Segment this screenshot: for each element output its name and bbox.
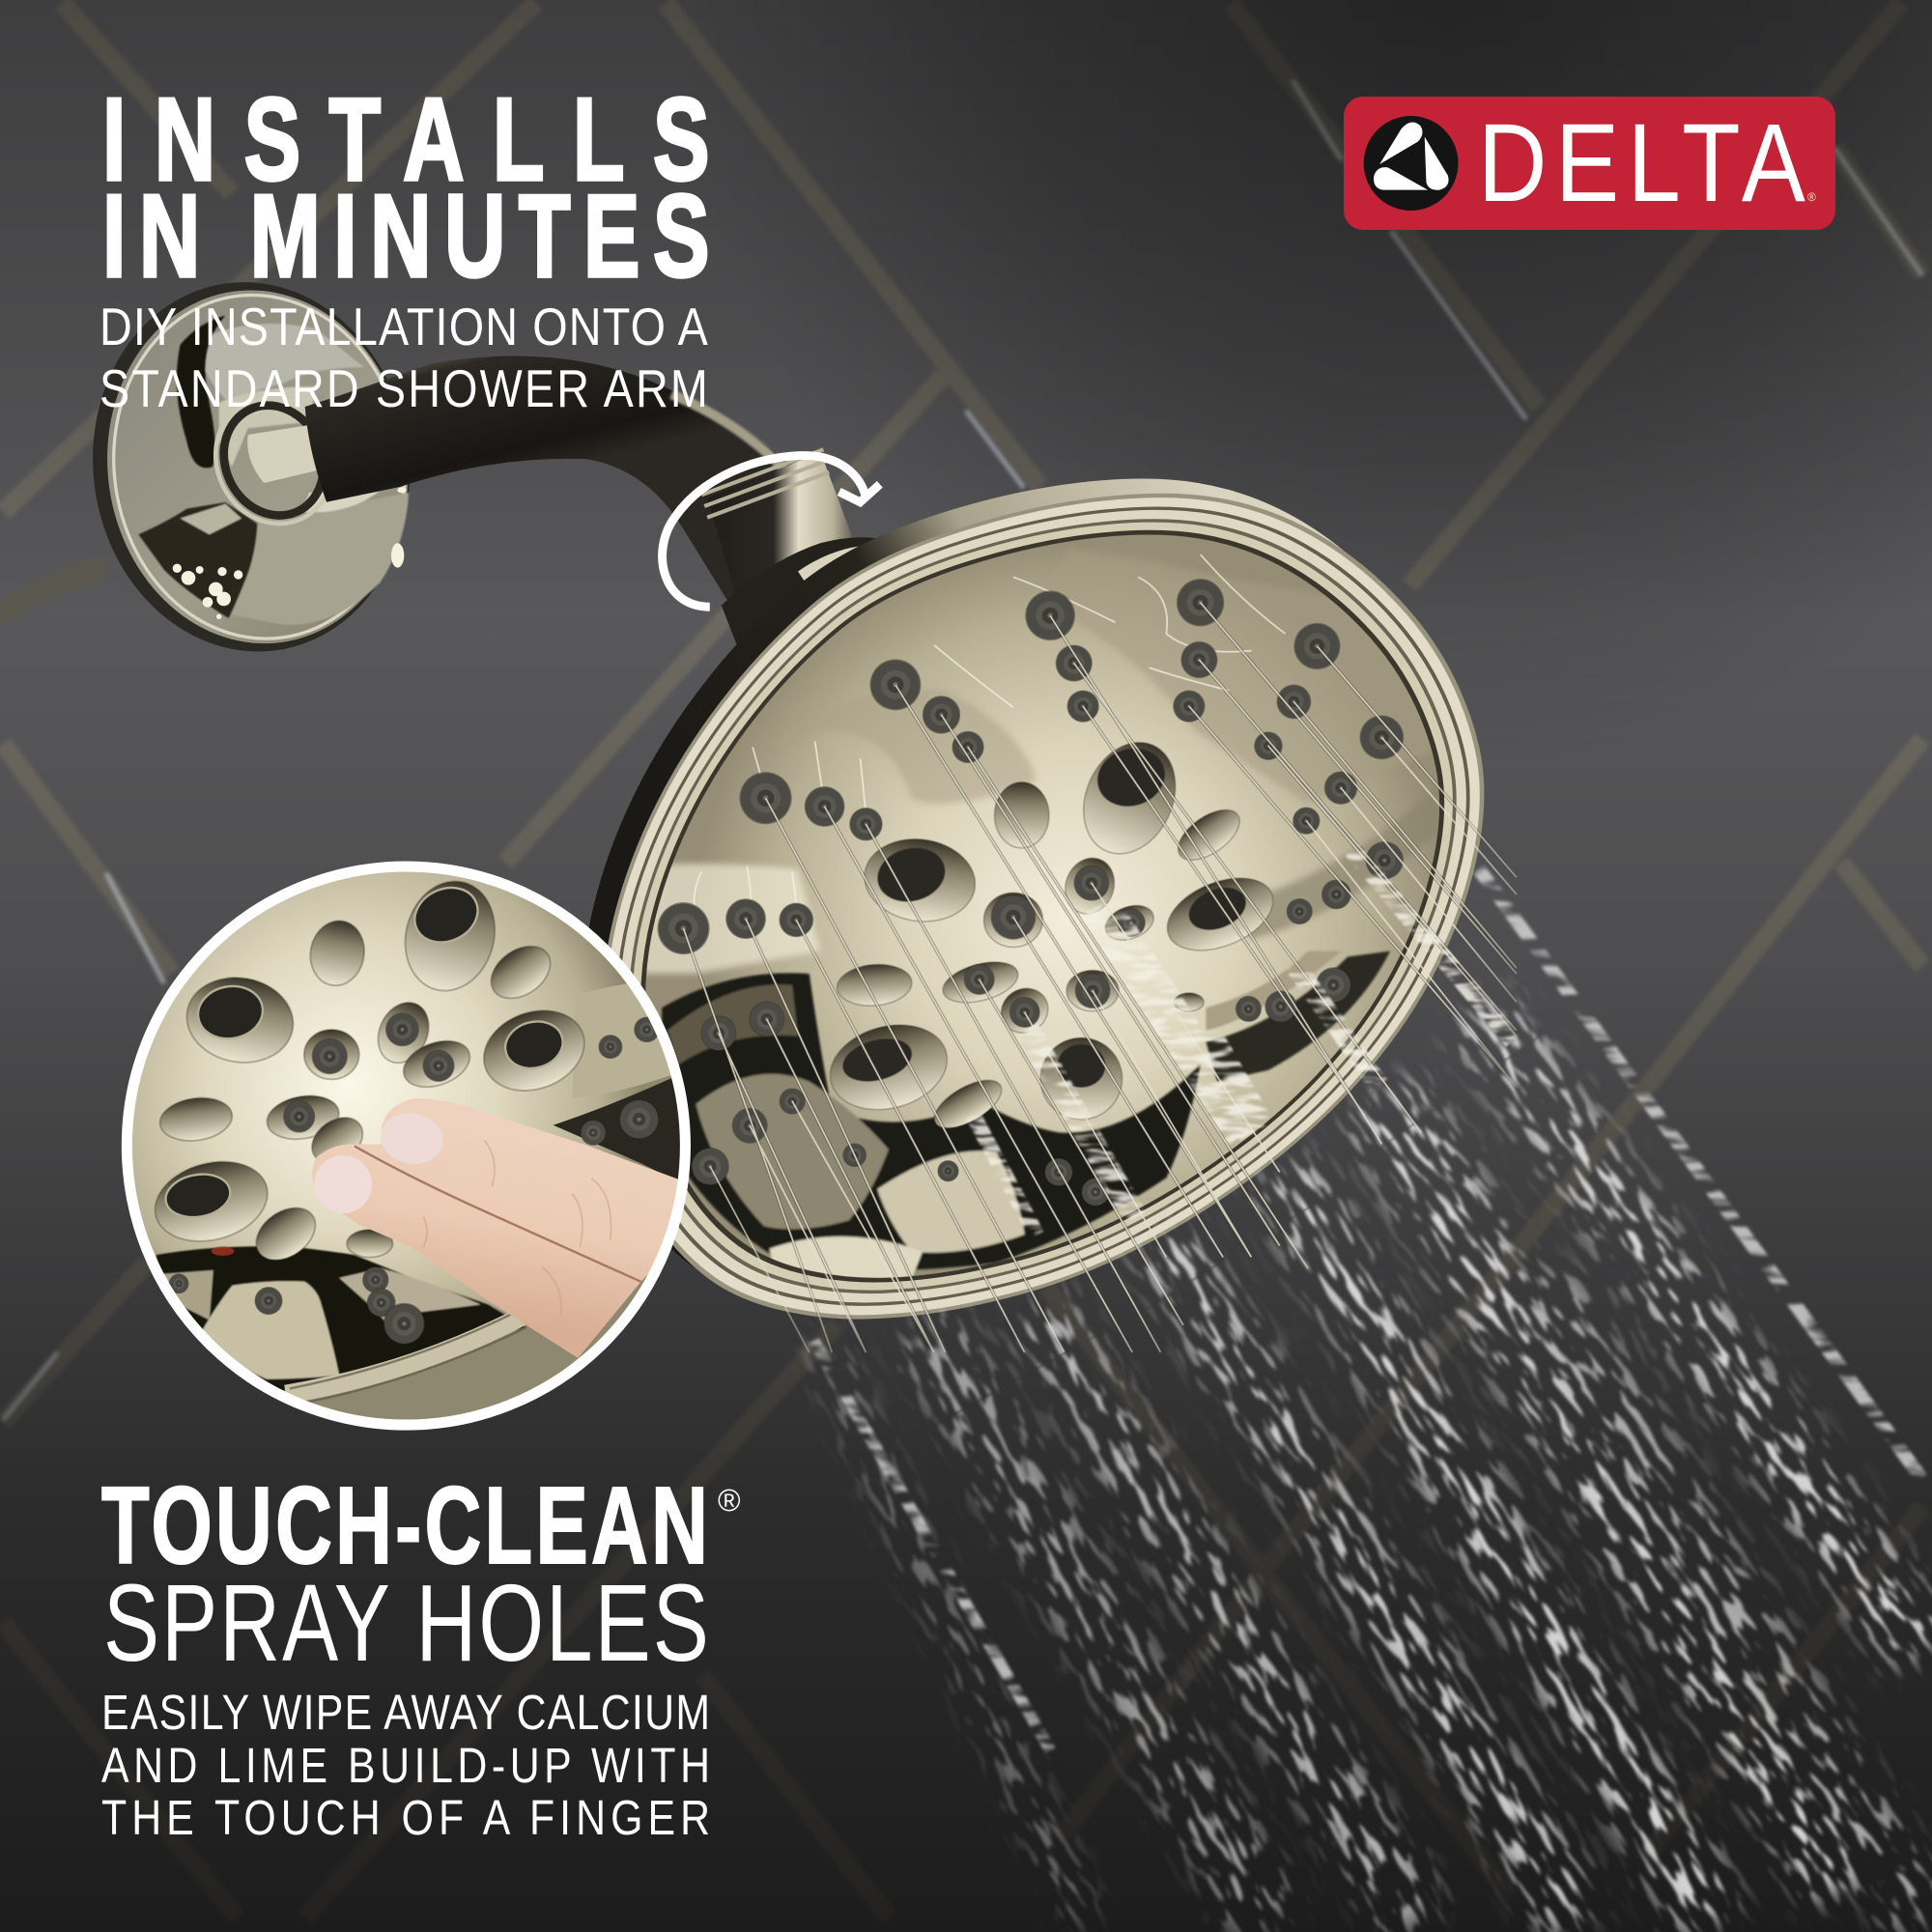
inset metal face <box>106 850 705 1449</box>
shower head <box>571 449 1535 1352</box>
fine water jets from nozzles <box>683 603 1517 1352</box>
flange reflections <box>138 316 409 625</box>
registered mark: ® <box>718 1483 741 1518</box>
nozzles <box>627 579 1404 1207</box>
inset rim arcs <box>286 1314 526 1404</box>
touch-clean title: TOUCH-CLEAN <box>101 1464 708 1586</box>
flange plate <box>70 262 433 672</box>
description line one: EASILY WIPE AWAY CALCIUM <box>101 1684 710 1740</box>
wall flange <box>70 262 433 672</box>
registered mark: ® <box>1807 190 1816 204</box>
two fingers <box>312 1098 687 1358</box>
install description line one: DIY INSTALLATION ONTO A <box>99 297 708 356</box>
threaded neck and collar <box>701 449 895 656</box>
heading: touch-clean spray holes <box>101 1464 741 1845</box>
arm stub <box>247 425 319 483</box>
Delta triangle emblem <box>1364 116 1458 211</box>
inset lower dark reflection <box>156 1246 526 1392</box>
headline line two: IN MINUTES <box>102 170 710 301</box>
heavy water streams over face <box>966 844 1520 1238</box>
inset nozzles <box>169 1012 660 1345</box>
inset dimples <box>146 871 596 1270</box>
inset right side reflection <box>554 1064 702 1194</box>
spray face <box>645 535 1439 1279</box>
shower arm <box>305 355 850 610</box>
description line three: THE TOUCH OF A FINGER <box>101 1789 710 1845</box>
large spray dimples <box>820 727 1284 1122</box>
spray holes subtitle: SPRAY HOLES <box>103 1563 709 1685</box>
inset: finger wiping spray holes <box>106 850 705 1449</box>
heading: installs in minutes <box>99 73 710 418</box>
right dark crescent <box>1206 952 1390 1082</box>
upper reflections <box>628 549 1444 974</box>
water trails on metal <box>694 554 1286 917</box>
edge streams <box>809 865 1927 1753</box>
rim rings <box>602 494 1484 1320</box>
install description line two: STANDARD SHOWER ARM <box>99 358 708 418</box>
inset white border <box>127 867 685 1425</box>
reflected pipe on wall <box>0 555 108 628</box>
small metal dimples <box>836 782 1248 1138</box>
Delta wordmark: DELTA <box>1478 100 1805 225</box>
flange collar rings <box>195 378 354 543</box>
spray, left fan <box>798 1280 1455 1932</box>
headline line one: INSTALLS <box>102 73 710 205</box>
white rotation arrow <box>663 456 880 607</box>
description line two: AND LIME BUILD-UP WITH <box>101 1737 710 1793</box>
inset dark spray slots <box>162 878 568 1222</box>
sparkles <box>173 487 407 619</box>
head back shell <box>582 479 1464 1304</box>
lower dark reflection <box>662 952 1390 1280</box>
Delta logo badge <box>1344 97 1835 230</box>
